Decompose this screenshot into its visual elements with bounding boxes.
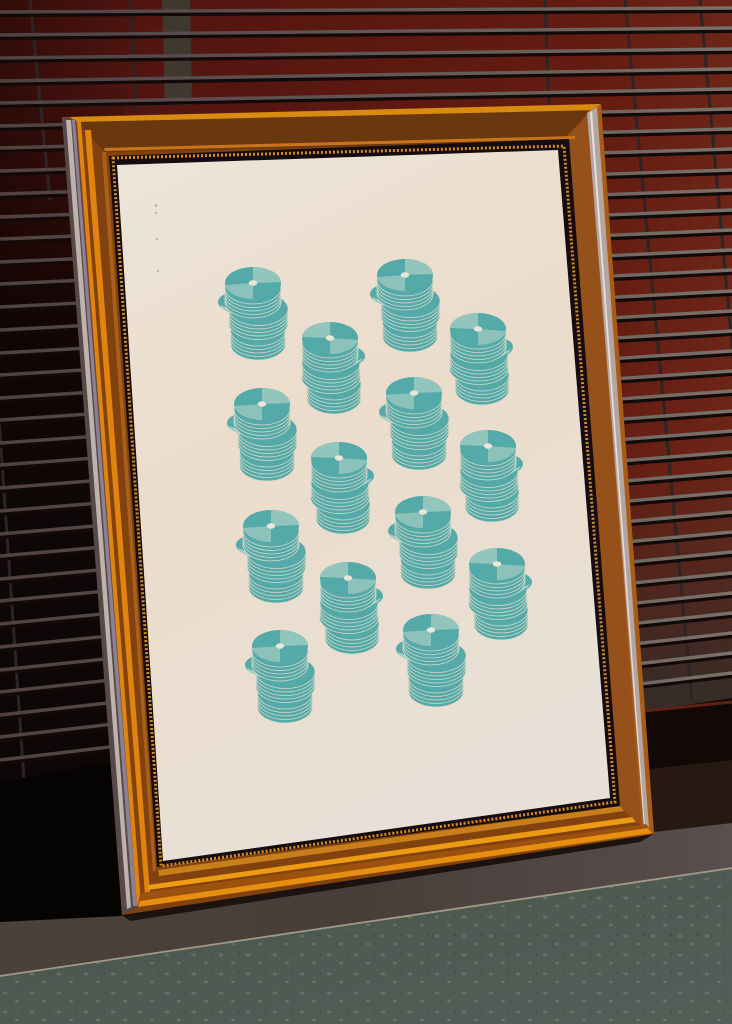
frame: left orange highlights [77,122,156,905]
disc stack 1 [218,267,288,360]
disc stack 5 [227,388,297,481]
disc stack 10 [388,496,458,589]
left wall shadow [0,80,125,800]
metal shutter grille [0,0,732,780]
frame: right inner band [568,112,646,830]
frame: top inner line [104,136,575,151]
gilded picture frame [62,104,654,915]
disc stack 4 [450,313,513,405]
dark recess at base of shutter, right [640,698,732,840]
disc stack 2 [370,259,440,352]
disc stack 6 [379,377,449,470]
pavement floor [0,868,732,1024]
disc stack 8 [460,430,523,522]
frame: beaded inner edge [109,139,620,867]
shadow under frame [122,834,654,921]
poster paper [117,150,610,861]
frame: bottom mouldings [138,806,654,907]
disc stack 12 [468,548,532,640]
right wall lower shadow [600,470,732,710]
poster artwork: stacks of discs [218,259,532,723]
disc stack 7 [310,442,374,534]
disc stack 3 [302,322,365,414]
frame: left silver moulding [62,117,138,915]
frame: top dark band [75,107,590,152]
concrete ledge [0,823,732,976]
disc stack 14 [396,614,466,707]
dark recess at base of shutter, left [0,762,125,925]
frame: right silver moulding [587,104,654,834]
disc stack 9 [236,510,306,603]
brick wall background [0,0,732,800]
disc stack 13 [245,630,315,723]
disc stack 11 [320,562,383,654]
paper marks [156,204,158,272]
frame: top highlight [70,104,600,122]
